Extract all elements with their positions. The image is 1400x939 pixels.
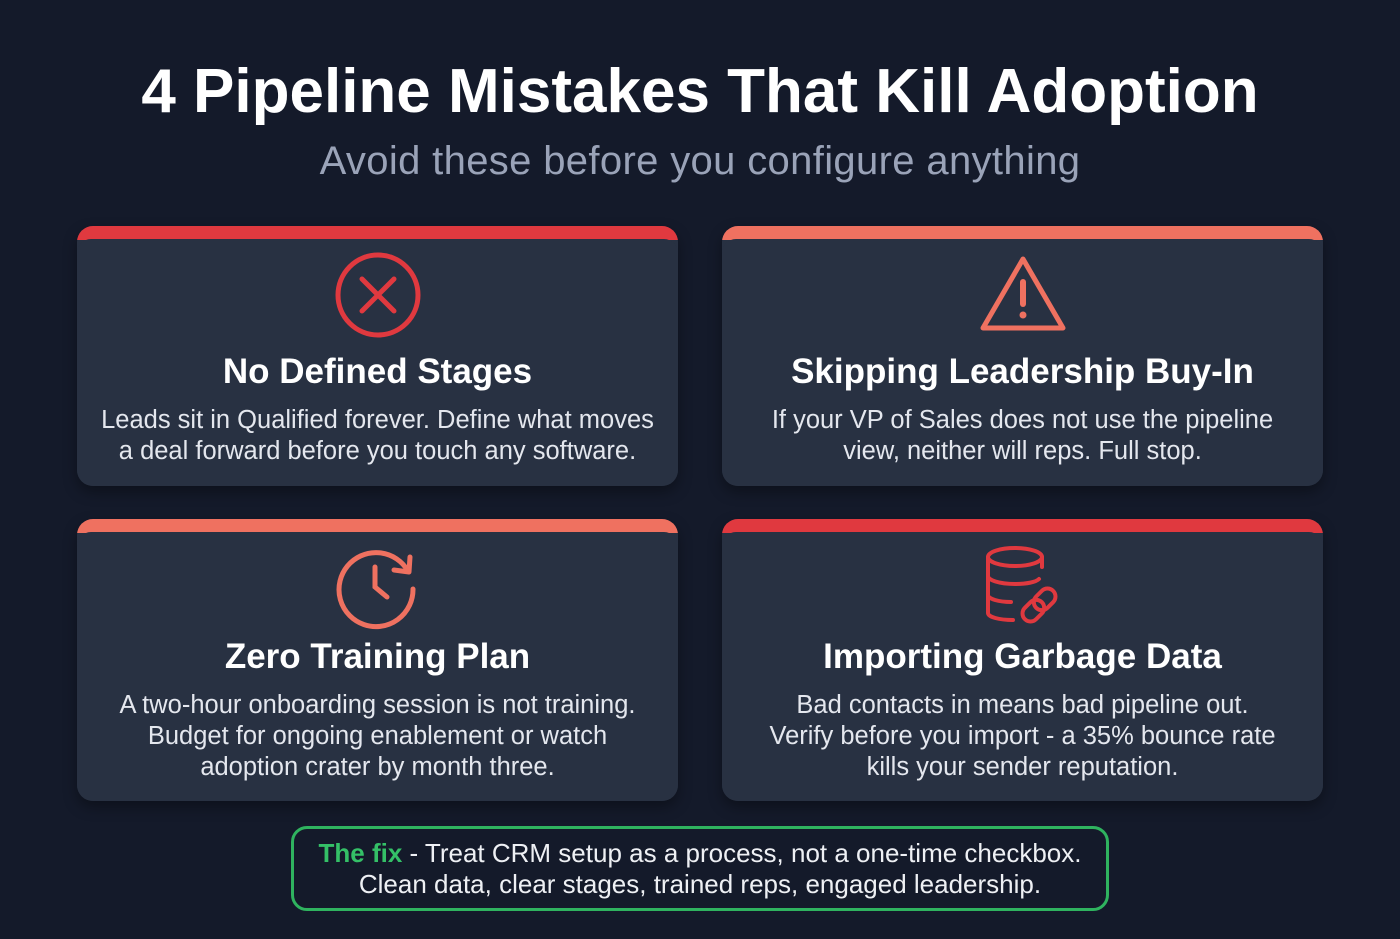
icon: x circle [336,252,420,338]
heading: Skipping Leadership Buy-In [791,352,1254,391]
callout: the fix: The fix - Treat CRM setup as a process, not a one-time checkbox. [318,838,1081,868]
text: If your VP of Sales does not use the pipeline [772,406,1273,434]
subtitle: Avoid these before you configure anything [320,139,1080,183]
panel: zero training plan [77,519,678,801]
text: A two-hour onboarding session is not training. [120,691,635,719]
text [101,406,654,465]
text: Budget for ongoing enablement or watch [148,722,607,750]
text [769,691,1276,781]
text: view, neither will reps. Full stop. [843,437,1202,465]
title: 4 Pipeline Mistakes That Kill Adoption [141,57,1259,126]
text: Bad contacts in means bad pipeline out. [796,691,1249,719]
panel: garbage data [722,519,1323,801]
text: kills your sender reputation. [867,753,1178,781]
text: Leads sit in Qualified forever. Define what moves [101,406,654,434]
text: Verify before you import - a 35% bounce rate [769,722,1276,750]
icon: warning [980,256,1066,330]
text: adoption crater by month three. [200,753,555,781]
callout: the fix [291,826,1109,911]
text: a deal forward before you touch any software. [119,437,636,465]
heading: No Defined Stages [223,352,532,391]
icon: clock refresh [336,550,416,630]
panel: leadership buy-in [722,226,1323,486]
text [120,691,635,781]
panel: no defined stages [77,226,678,486]
heading: Zero Training Plan [225,637,530,676]
text [772,406,1273,465]
callout: the fix: Clean data, clear stages, trained reps, engaged leadership. [359,869,1041,899]
heading: Importing Garbage Data [823,637,1222,676]
icon: database link [986,546,1058,624]
